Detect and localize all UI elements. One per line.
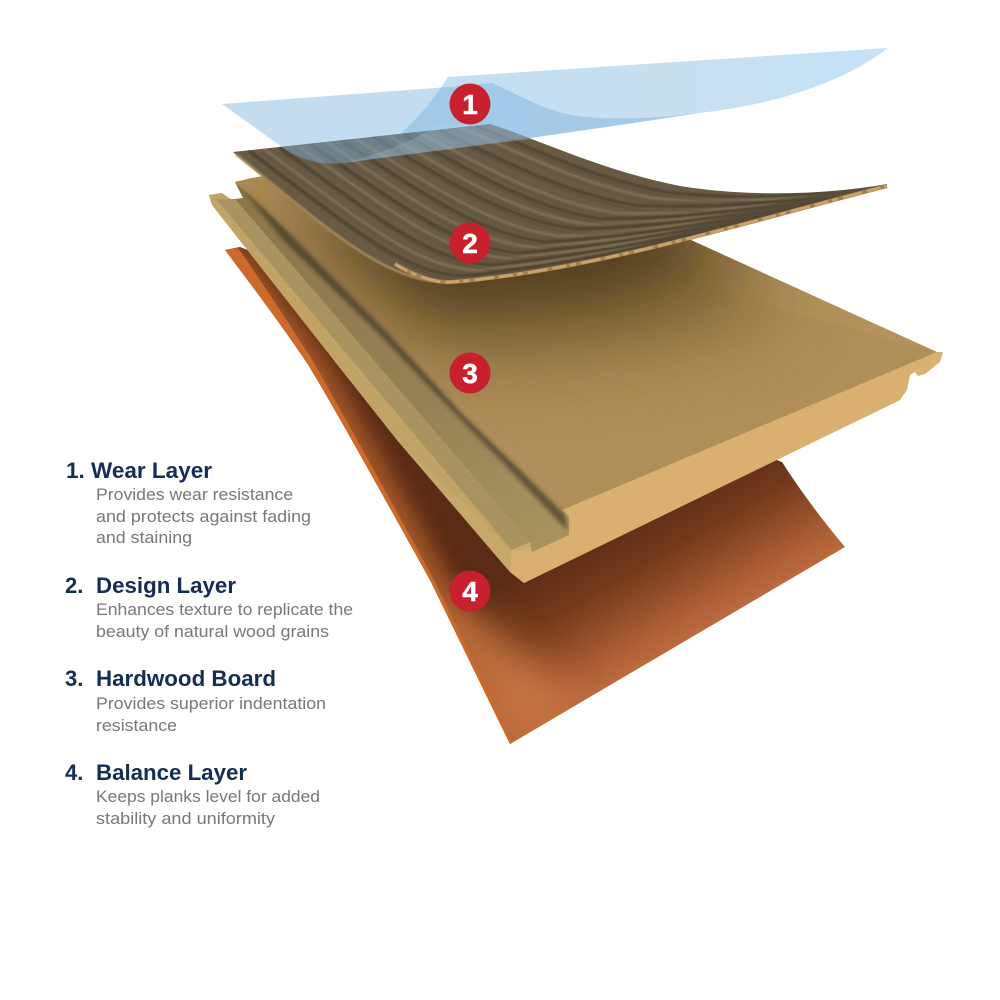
wood curved side edge <box>236 154 450 282</box>
marker 4 <box>450 570 490 612</box>
legend item 1: wear layer <box>66 458 311 547</box>
board top surface <box>235 176 937 510</box>
legend item 4: balance layer: 4. <box>65 760 83 785</box>
fold streak over wood <box>348 124 533 162</box>
legend item 2: design layer: Design Layer <box>96 573 236 598</box>
legend item 2: design layer <box>65 573 353 641</box>
legend item 4: balance layer: stability and uniformity <box>96 810 276 828</box>
legend item 1: wear layer: Provides wear resistance <box>96 486 293 504</box>
board grain noise <box>205 170 945 560</box>
layer 2: design layer <box>233 124 888 284</box>
board front lip face <box>510 365 900 583</box>
legend item 1: wear layer: 1. Wear Layer <box>66 458 212 483</box>
layer 3: hardwood board <box>205 160 950 583</box>
legend item 3: hardwood board: 3. <box>65 666 83 691</box>
flat sheet <box>222 83 700 164</box>
legend item 2: design layer: 2. <box>65 573 83 598</box>
board lip top <box>216 199 530 550</box>
legend item 4: balance layer <box>65 760 320 828</box>
legend item 3: hardwood board: Provides superior indentation <box>96 695 326 713</box>
legend item 1: wear layer: and protects against fading <box>96 508 311 526</box>
legend item 3: hardwood board <box>65 666 326 735</box>
legend item 3: hardwood board: resistance <box>96 717 177 735</box>
legend item 3: hardwood board: Hardwood Board <box>96 666 276 691</box>
legend item 1: wear layer: and staining <box>96 529 192 547</box>
marker 2: 2 <box>462 228 478 259</box>
marker 1: 1 <box>462 89 478 120</box>
board outer band <box>209 193 530 572</box>
legend item 4: balance layer: Balance Layer <box>96 760 247 785</box>
channel shadow <box>240 186 568 531</box>
layer 1b: wear layer curl behind wood <box>350 48 888 162</box>
wood cut edge <box>395 186 887 282</box>
marker 1 <box>450 84 490 124</box>
marker 3 <box>450 352 490 394</box>
layer 1: wear layer <box>222 83 700 164</box>
legend item 2: design layer: Enhances texture to replicate the <box>96 601 353 619</box>
marker 2 <box>450 222 490 264</box>
wood surface with grain <box>233 124 887 280</box>
legend item 2: design layer: beauty of natural wood grains <box>96 623 329 641</box>
board channel <box>235 182 569 552</box>
marker 3: 3 <box>462 358 478 389</box>
legend item 4: balance layer: Keeps planks level for added <box>96 788 320 806</box>
layer 4: balance layer <box>220 240 850 750</box>
board side and front faces <box>209 178 943 583</box>
balance layer bright edge <box>225 248 513 744</box>
marker 4: 4 <box>462 576 478 607</box>
